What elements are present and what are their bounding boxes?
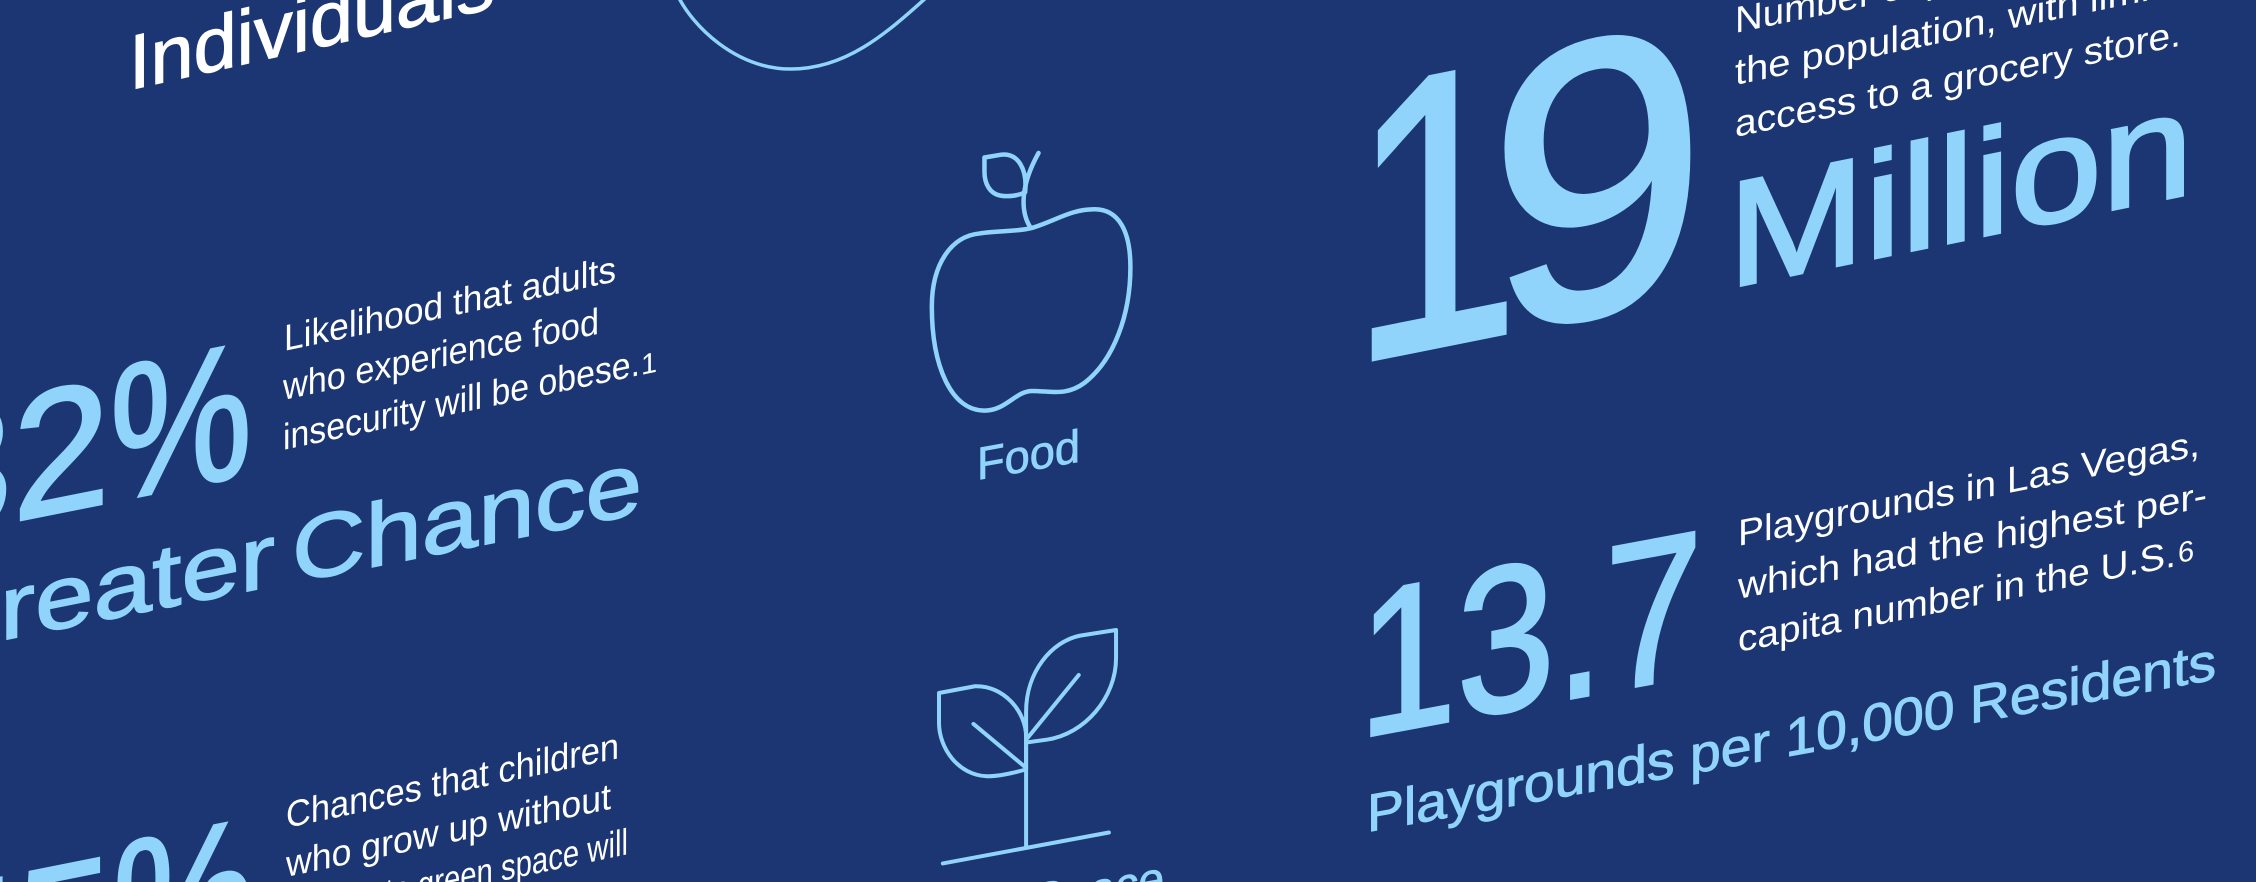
text block: green space: Chances that children <box>286 724 619 836</box>
stat label: Greater Chance: Chance <box>292 433 642 603</box>
panel: left statistics <box>0 248 657 882</box>
stat label: Greater Chance <box>0 433 642 677</box>
text block: green space: who grow up without <box>285 775 612 882</box>
panel: right statistics <box>1350 0 2216 844</box>
stat: 32% <box>0 300 252 580</box>
stat: 13.7: 13.7 <box>1358 486 1703 783</box>
text block: playgrounds <box>1737 422 2207 660</box>
text block: playgrounds: Playgrounds in Las Vegas, <box>1738 422 2200 554</box>
label: Food: Food <box>977 420 1080 490</box>
text block: food insecurity: who experience food <box>282 300 599 408</box>
panel: centre icons <box>892 153 1164 882</box>
text block: food insecurity: Likelihood that adults <box>284 248 616 359</box>
text block: green space <box>285 724 628 882</box>
stat label: Playgrounds per 10,000 Residents: Playgrounds per 10,000 Residents <box>1367 633 2216 844</box>
text block: food insecurity: insecurity will be obese. <box>283 341 640 458</box>
icon: sprout <box>939 630 1116 863</box>
text block: playgrounds: which had the highest per- <box>1737 473 2207 607</box>
icon: large outline at top <box>678 0 928 69</box>
stat label: Million: Million <box>1728 59 2193 321</box>
text block: food insecurity: 1 <box>641 346 657 382</box>
stat: 19 <box>1350 0 1707 448</box>
stat: 55% <box>0 776 255 882</box>
text block: playgrounds: capita number in the U.S. <box>1738 532 2176 660</box>
text block: grocery access: access to a grocery store. <box>1735 12 2181 145</box>
stat: 32%: % <box>110 300 252 544</box>
text block: playgrounds: 6 <box>2178 535 2194 570</box>
text block: food insecurity <box>282 248 657 458</box>
icon: apple <box>932 153 1130 411</box>
